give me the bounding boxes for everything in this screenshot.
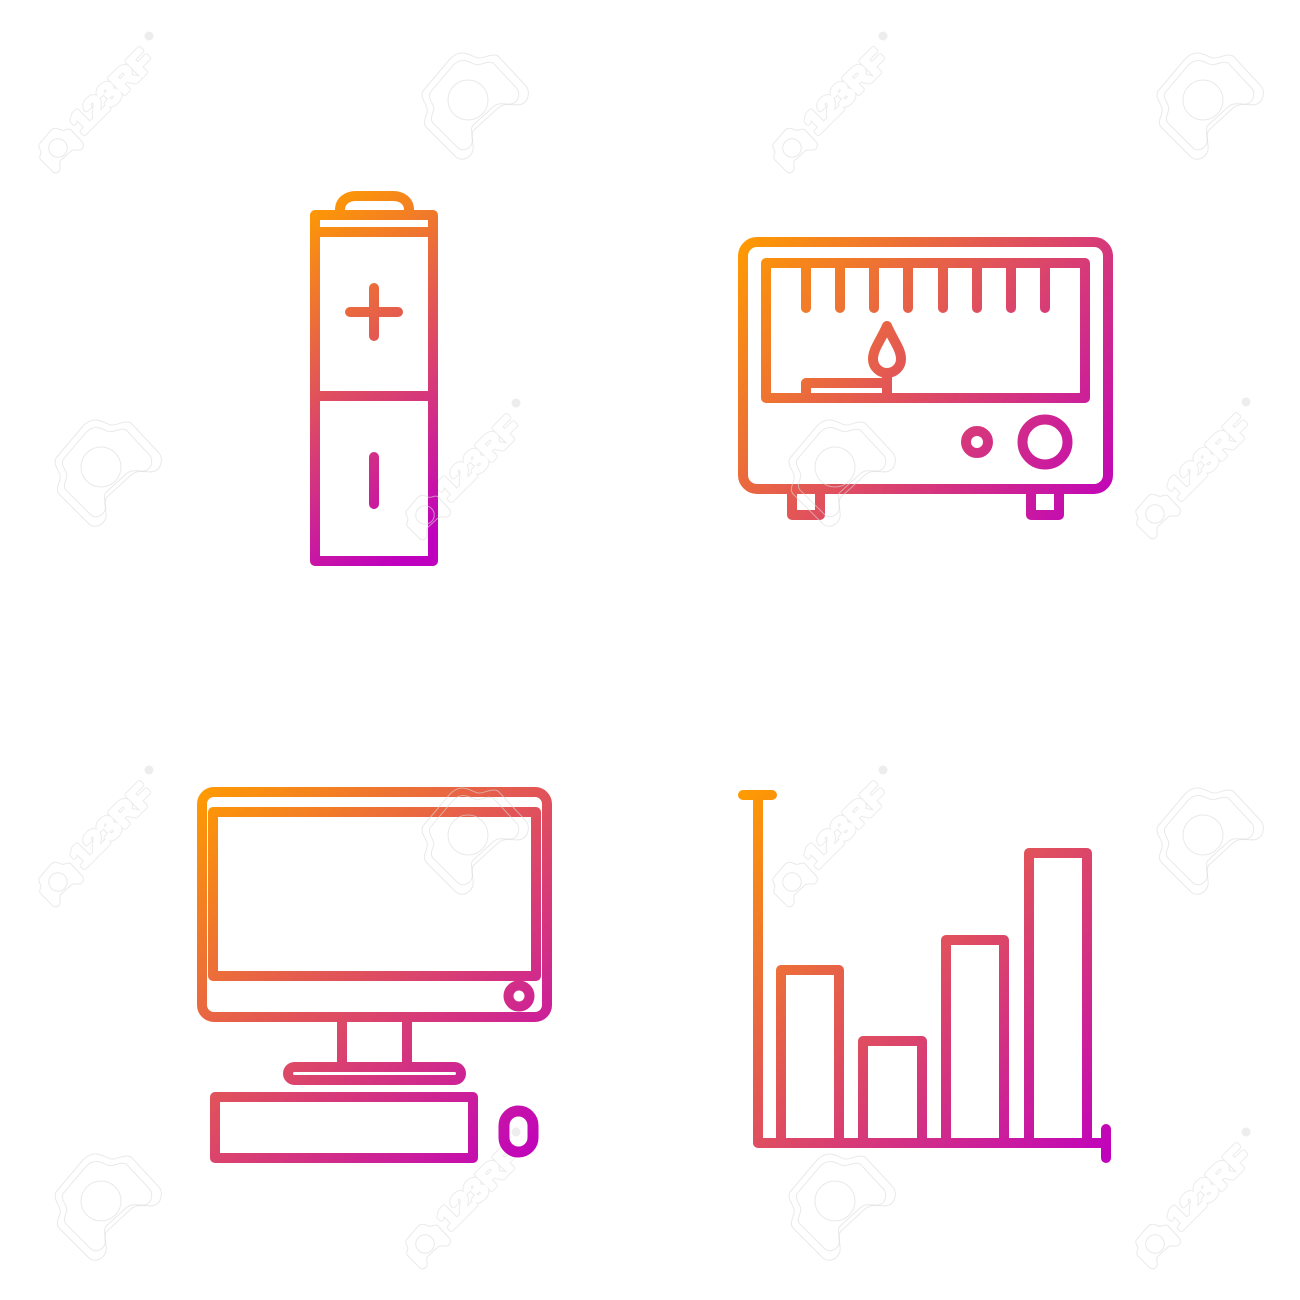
icon: desktop computer bbox=[202, 792, 547, 1158]
watermark: stamps row 1: 123RF bbox=[63, 43, 160, 140]
watermark: stamps row 2: 123RF bbox=[1160, 409, 1257, 506]
watermark: stamps row 1: 123RF bbox=[63, 43, 160, 140]
watermark: stamps row 2: 123RF bbox=[1160, 409, 1257, 506]
watermark: stamps row 3 bbox=[39, 766, 1263, 907]
icon: analog gauge meter bbox=[743, 242, 1108, 515]
watermark: stamps row 4: 123RF bbox=[430, 1139, 527, 1236]
watermark: stamps row 2: 123RF bbox=[430, 410, 527, 507]
icon: battery bbox=[315, 196, 433, 561]
watermark: stamps row 2 bbox=[55, 398, 1257, 539]
watermark: stamps row 3: 123RF bbox=[797, 777, 894, 874]
watermark: stamps row 4 bbox=[55, 1128, 1257, 1269]
icon: bar chart bbox=[743, 795, 1106, 1158]
watermark: stamps row 4: 123RF bbox=[1160, 1139, 1257, 1236]
watermark: stamps row 3: 123RF bbox=[63, 777, 160, 874]
watermark: stamps row 4: 123RF bbox=[430, 1139, 527, 1236]
watermark: stamps row 3: 123RF bbox=[63, 777, 160, 874]
watermark: stamps row 2: 123RF bbox=[430, 410, 527, 507]
watermark: stamps row 1: 123RF bbox=[797, 43, 894, 140]
watermark: stamps row 1 bbox=[39, 32, 1263, 173]
watermark: stamps overlapping the icons bbox=[406, 420, 895, 1269]
watermark: stamps row 3: 123RF bbox=[797, 777, 894, 874]
watermark: stamps row 1: 123RF bbox=[797, 43, 894, 140]
watermark: stamps row 4: 123RF bbox=[1160, 1139, 1257, 1236]
